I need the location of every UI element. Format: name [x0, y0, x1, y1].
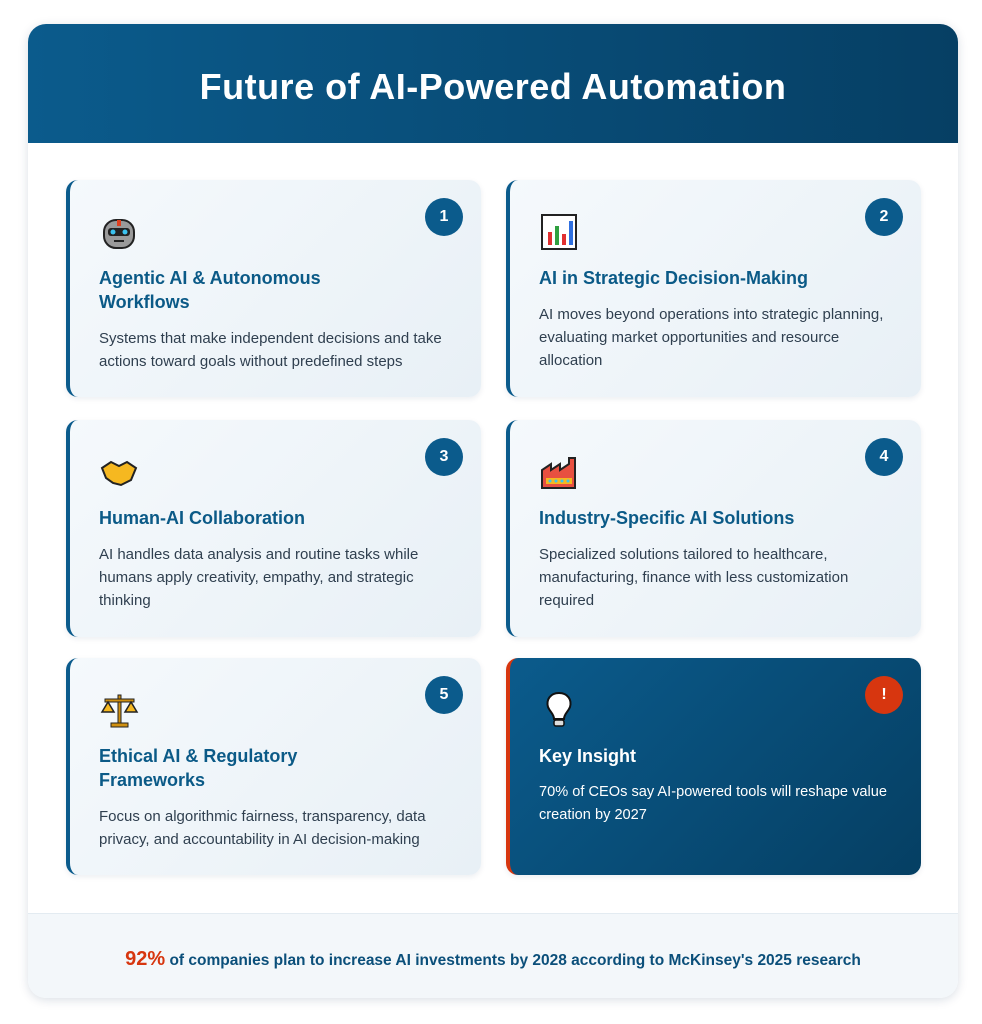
header: Future of AI-Powered Automation — [200, 66, 786, 107]
badge 3: 3 — [440, 448, 448, 465]
title: Agentic AI & Autonomous — [99, 268, 321, 288]
icon: scales — [100, 694, 138, 728]
badge 3 — [425, 438, 463, 476]
title: Key Insight — [539, 746, 636, 766]
panel: card 5 — [66, 658, 481, 875]
icon: factory — [541, 457, 576, 489]
title: Workflows — [99, 292, 190, 312]
title: Industry-Specific AI Solutions — [539, 508, 794, 528]
title — [99, 746, 298, 790]
description: Specialized solutions tailored to healthcare, manufacturing, finance with less customization required — [539, 546, 848, 609]
description: AI moves beyond operations into strategic planning, evaluating market opportunities and resource allocation — [539, 306, 883, 369]
panel: card 3 — [66, 420, 481, 637]
panel: card 2 — [506, 180, 921, 397]
title: AI in Strategic Decision-Making — [539, 268, 808, 288]
badge 5 — [425, 676, 463, 714]
badge 5: 5 — [440, 686, 448, 703]
badge alert: ! — [881, 686, 887, 703]
icon: chart — [541, 214, 577, 250]
title — [99, 268, 321, 312]
badge 4: 4 — [880, 448, 888, 465]
description: 70% of CEOs say AI-powered tools will reshape value creation by 2027 — [539, 784, 887, 823]
icon: light bulb — [546, 692, 572, 727]
icon: handshake — [100, 460, 138, 486]
title: Frameworks — [99, 770, 205, 790]
badge 1 — [425, 198, 463, 236]
badge 1: 1 — [440, 208, 448, 225]
description: Focus on algorithmic fairness, transparency, data privacy, and accountability in AI decision-making — [99, 808, 426, 848]
badge 2: 2 — [880, 208, 888, 225]
panel: key insight — [506, 658, 921, 875]
badge 2 — [865, 198, 903, 236]
title: Ethical AI & Regulatory — [99, 746, 297, 766]
badge alert — [865, 676, 903, 714]
footer stat: 92% of companies plan to increase AI investments by 2028 according to McKinsey's 2025 research — [125, 948, 861, 970]
header — [28, 24, 958, 143]
panel: card 1 — [66, 180, 481, 397]
panel: card 4 — [506, 420, 921, 637]
title: Human-AI Collaboration — [99, 508, 305, 528]
icon: robot — [103, 219, 135, 249]
description: Systems that make independent decisions and take actions toward goals without predefined steps — [99, 330, 442, 370]
badge 4 — [865, 438, 903, 476]
description: AI handles data analysis and routine tasks while humans apply creativity, empathy, and strategic thinking — [99, 546, 418, 609]
footer stat — [28, 913, 958, 998]
